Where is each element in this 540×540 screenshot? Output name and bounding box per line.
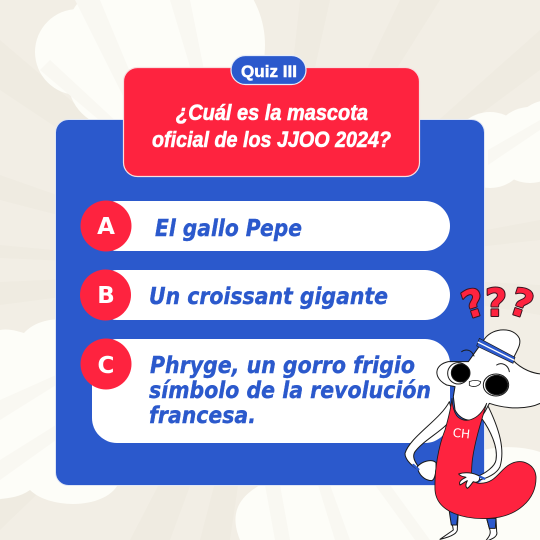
icon: question marks: ? — [504, 279, 539, 328]
badge: Quiz III: Quiz III — [241, 62, 297, 81]
panel: question header — [124, 68, 420, 176]
hand right — [459, 473, 480, 488]
icon: question marks: ? — [456, 279, 491, 328]
option B — [80, 270, 450, 320]
cloud: top left — [35, 0, 265, 140]
circle C — [80, 338, 132, 390]
option B: Un croissant gigante — [149, 284, 388, 310]
headband — [477, 338, 515, 363]
badge: Quiz III — [231, 56, 306, 84]
cloud: left lower — [0, 319, 120, 504]
panel: blue card — [56, 120, 484, 486]
singlet — [435, 398, 536, 519]
question text — [152, 100, 391, 152]
left arm and hand — [405, 402, 453, 470]
legs — [440, 512, 497, 540]
option C: C — [98, 353, 114, 379]
option C — [80, 338, 450, 443]
eyes — [448, 363, 509, 396]
eyebrows — [462, 350, 474, 356]
CH label: CH — [452, 426, 471, 441]
option C text: Phryge, un gorro frigio — [150, 353, 415, 379]
option C text: francesa. — [149, 403, 256, 429]
option C text: símbolo de la revolución — [149, 378, 431, 404]
circle B — [80, 270, 131, 320]
option A — [80, 200, 450, 252]
circle A — [80, 200, 132, 252]
option A: A — [97, 214, 115, 240]
question text: oficial de los JJOO 2024? — [152, 127, 391, 152]
head and neck — [437, 330, 540, 420]
cloud: bottom right — [235, 447, 540, 540]
option A: El gallo Pepe — [155, 216, 302, 242]
mascot: CH character — [405, 330, 540, 540]
question text: ¿Cuál es la mascota — [176, 100, 368, 125]
mouth — [469, 380, 481, 387]
cloud: right — [452, 100, 540, 188]
right arm — [478, 403, 502, 480]
icon: question marks — [456, 279, 539, 328]
icon: question marks: ? — [485, 281, 507, 325]
option B: B — [97, 283, 115, 309]
option C text — [149, 353, 431, 429]
